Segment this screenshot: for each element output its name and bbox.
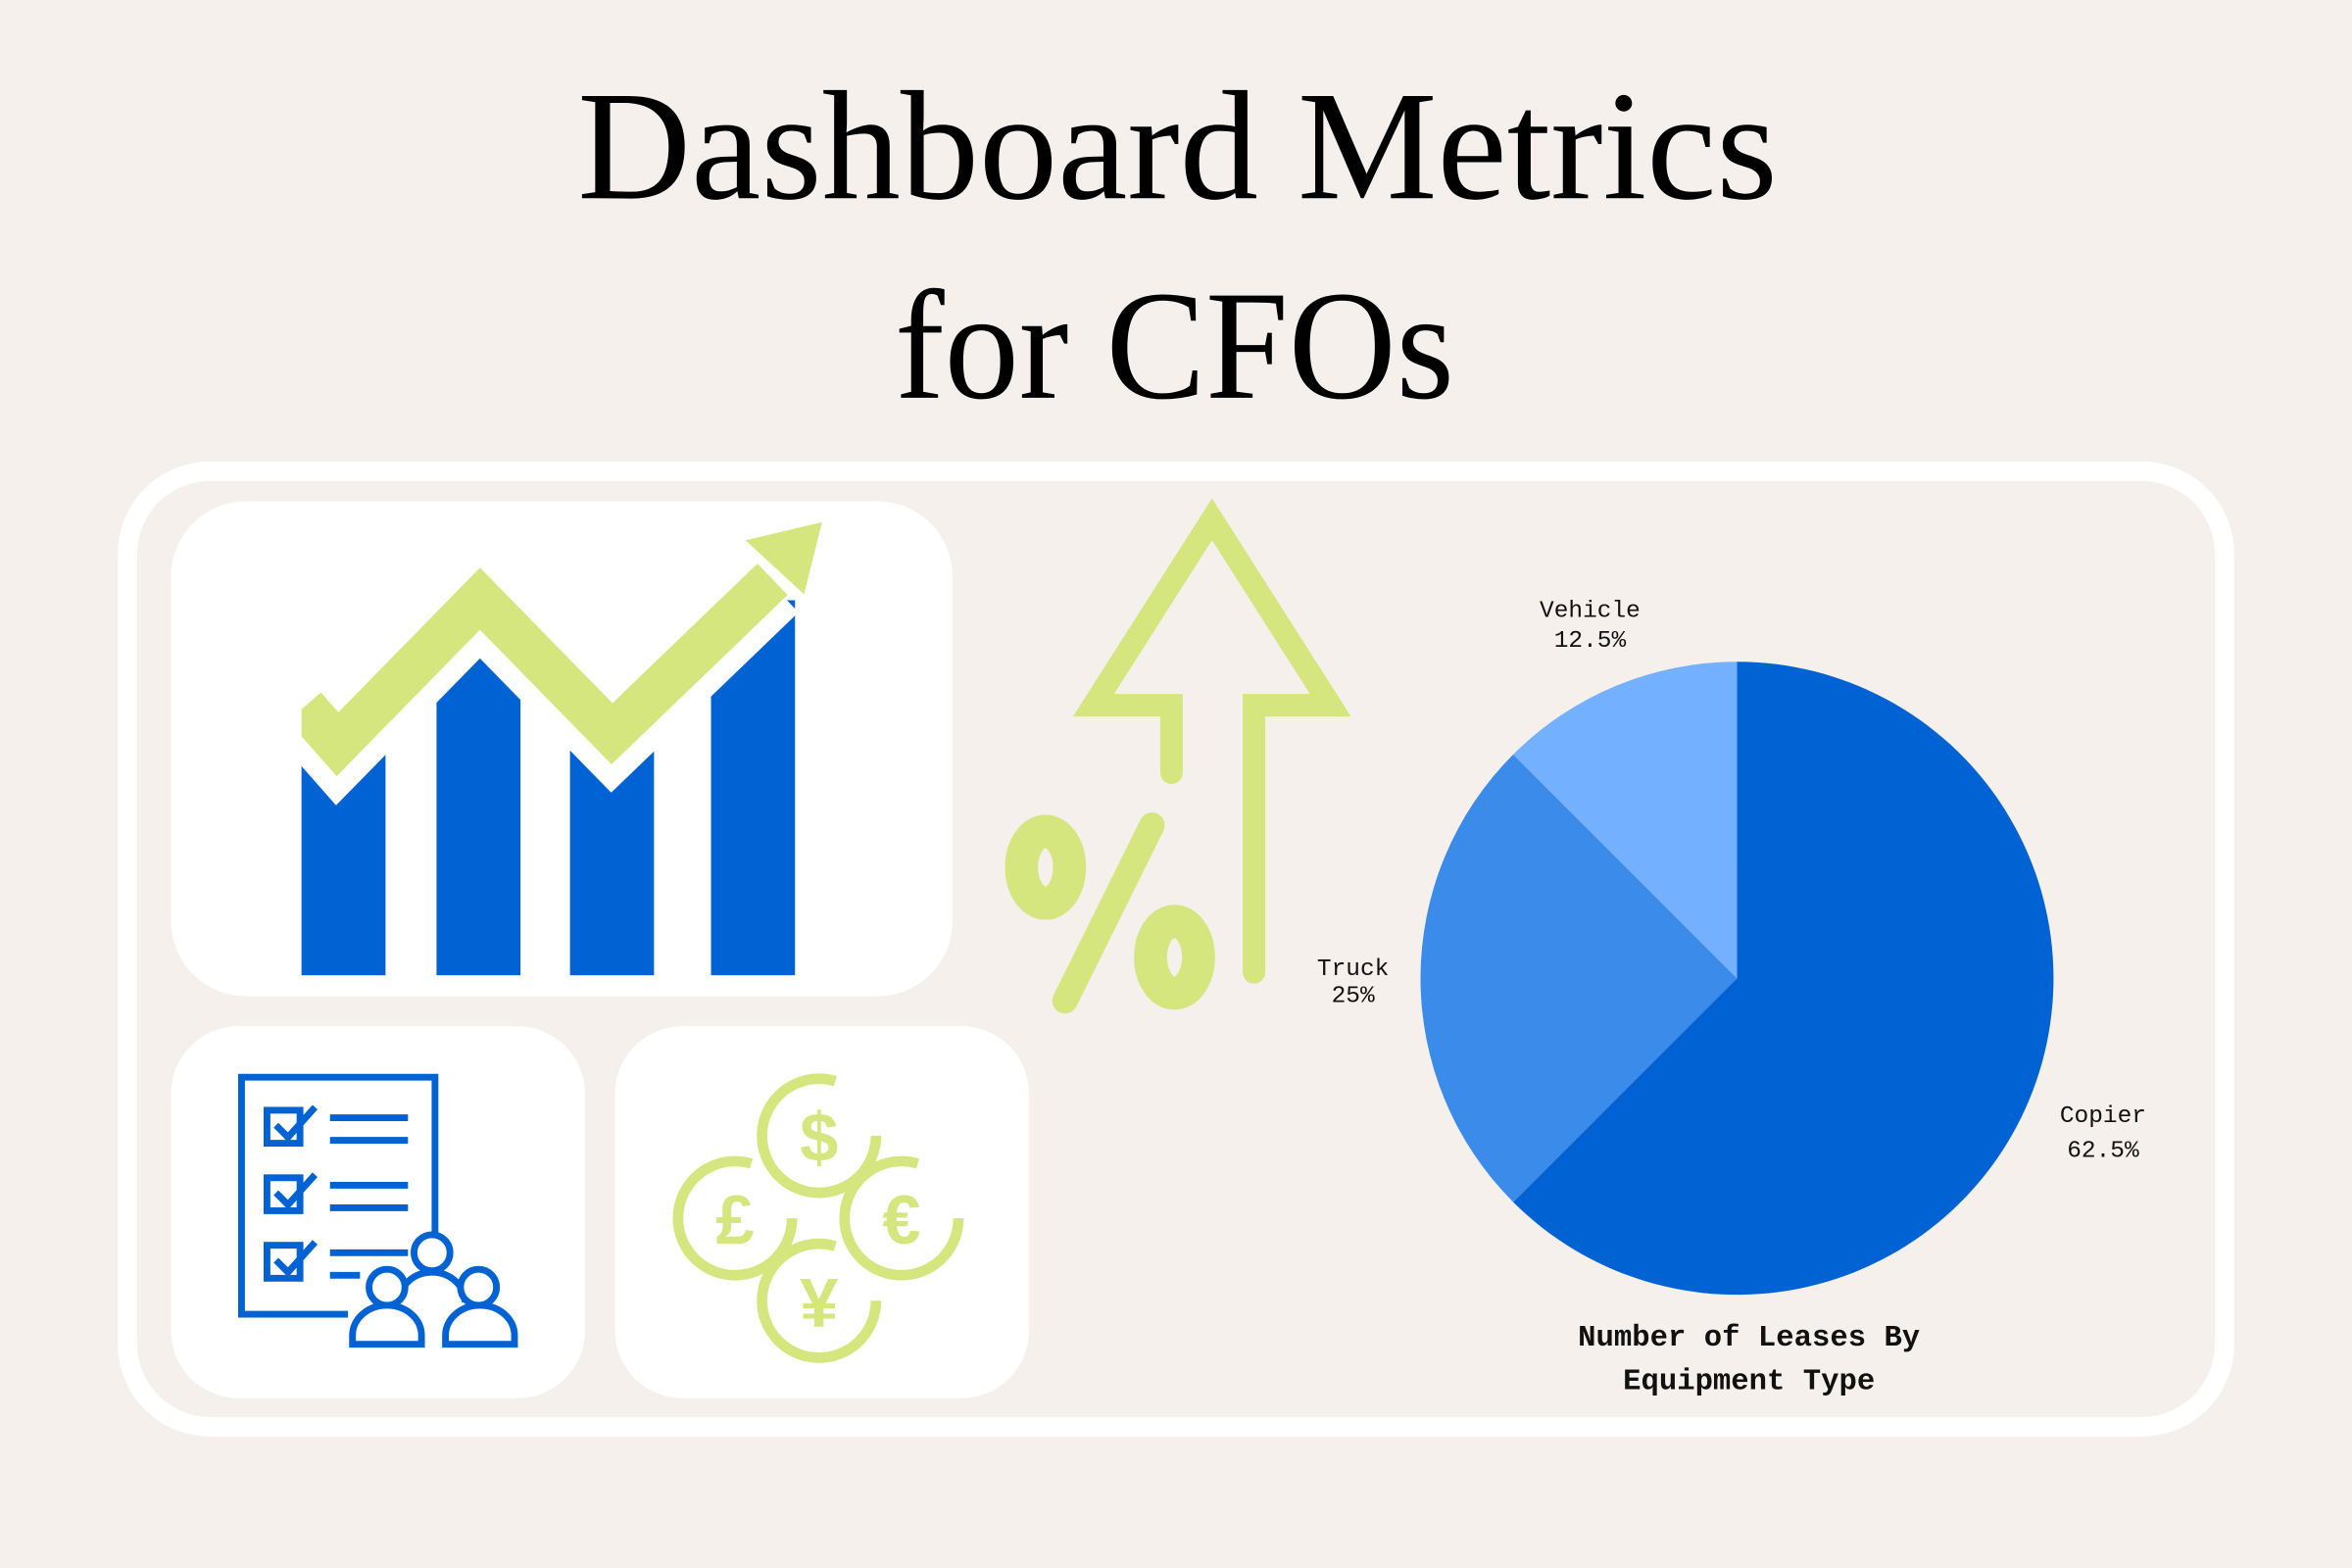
icon: percent — [1021, 825, 1199, 1001]
bars — [302, 600, 795, 975]
icon: currency coins — [678, 1079, 958, 1357]
pie labels: Vehicle — [1540, 598, 1641, 624]
trend arrow — [276, 522, 822, 765]
pie labels — [1317, 598, 2146, 1164]
pie labels: Truck — [1317, 956, 1389, 983]
pie labels: 12.5% — [1554, 628, 1626, 655]
panel: checklist — [171, 1026, 585, 1398]
title — [577, 60, 1778, 432]
outer frame — [127, 471, 2225, 1427]
panel: currencies: € — [882, 1181, 920, 1258]
panel: currencies: £ — [715, 1181, 755, 1258]
title: Dashboard Metrics — [577, 60, 1778, 232]
chart caption: Equipment Type — [1623, 1366, 1875, 1399]
panel: currencies: ¥ — [800, 1263, 838, 1341]
chart caption — [1578, 1322, 1920, 1399]
panel: currencies: $ — [800, 1099, 838, 1176]
chart caption: Number of Leases By — [1578, 1322, 1920, 1355]
icon: checklist with team — [241, 1077, 514, 1345]
panel: currencies — [615, 1026, 1029, 1398]
panel: growth chart — [171, 501, 953, 997]
pie labels: Copier — [2060, 1103, 2146, 1130]
pie chart — [1317, 598, 2146, 1399]
pie labels: 25% — [1332, 984, 1375, 1010]
pie labels: 62.5% — [2067, 1138, 2139, 1164]
title: for CFOs — [895, 260, 1454, 432]
icon: up arrow — [1094, 519, 1331, 972]
